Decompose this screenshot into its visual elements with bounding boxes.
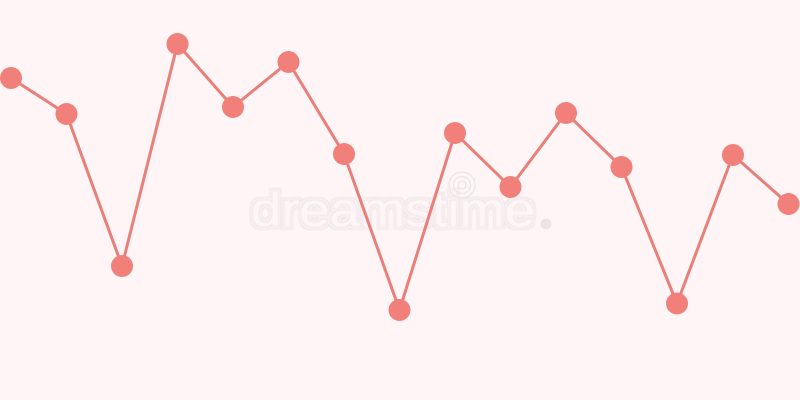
watermark spiral icon: [449, 172, 475, 198]
line series: [11, 44, 788, 310]
data points: [0, 33, 800, 321]
watermark: dreamstime: [251, 172, 552, 236]
watermark text: dreamstime: [251, 183, 535, 236]
line chart: [0, 33, 800, 321]
watermark dot: [540, 218, 552, 230]
